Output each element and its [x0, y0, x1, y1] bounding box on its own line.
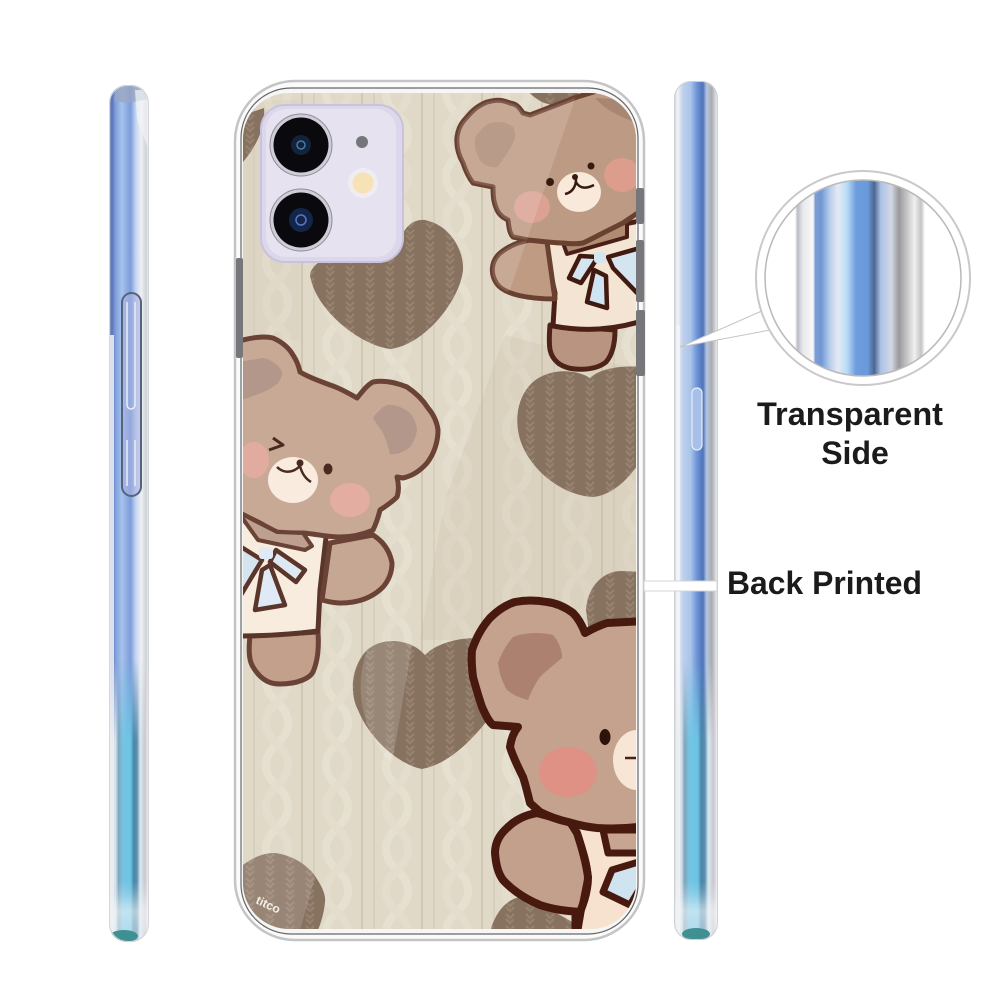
phone case: back view: [235, 81, 661, 940]
bear: bottom right: [472, 600, 661, 935]
eye: [600, 729, 610, 745]
shirt: [575, 825, 645, 935]
blush: [330, 483, 370, 517]
ear inner: [243, 358, 282, 400]
case frame: [235, 81, 644, 940]
muzzle: [268, 457, 318, 503]
knit texture: [243, 93, 636, 929]
head: [472, 600, 645, 829]
muzzle: [557, 172, 601, 212]
nose and mouth: [565, 179, 594, 194]
label: transparent side: Side: [821, 435, 889, 471]
blush: [539, 747, 597, 797]
knit hearts: [243, 90, 650, 932]
tip: [682, 928, 710, 940]
heart: top left sliver: [243, 108, 264, 162]
signature: titco: [254, 893, 283, 916]
tip: [110, 930, 138, 942]
ear inner: [475, 122, 515, 167]
foot: [249, 632, 318, 684]
bear: left wink: [238, 337, 438, 684]
nose and mouth: [277, 466, 311, 482]
magnifier callout: transparent side: [680, 171, 970, 385]
back printed leader line: [644, 581, 717, 591]
gloss: top bear: [456, 98, 576, 292]
magnified stripes: [765, 180, 961, 376]
shirt: [238, 520, 328, 636]
mouth: [625, 757, 640, 759]
head: [238, 337, 438, 537]
arm: [492, 240, 555, 299]
collar: [243, 517, 314, 552]
bow: [238, 545, 305, 610]
muzzle: [613, 730, 661, 790]
label: transparent side: [757, 396, 943, 471]
head: [457, 90, 645, 244]
heart: right: [517, 366, 636, 497]
label: transparent side: Transparent: [757, 396, 943, 432]
heart: centre: [310, 220, 463, 349]
collar: [603, 830, 645, 853]
collar: [563, 220, 627, 254]
arm: [495, 813, 588, 912]
foot: [549, 325, 615, 369]
gloss on hearts: [243, 853, 315, 930]
phone side view: right: [674, 81, 718, 950]
phone side view: left: [109, 85, 149, 950]
blush: [514, 191, 550, 223]
flash: [348, 168, 378, 198]
printed back panel: [238, 90, 661, 935]
heart: bottom left: [243, 853, 325, 930]
magnifier ring: [756, 171, 970, 385]
shirt: [550, 219, 636, 332]
bear: top right: [457, 90, 645, 369]
heart: lower centre: [353, 638, 495, 769]
side buttons: [122, 293, 141, 496]
eye: [324, 464, 332, 474]
heart: bottom edge: [490, 898, 572, 929]
side keys: [236, 188, 645, 376]
eyes: [546, 178, 554, 186]
pointer: [680, 310, 770, 347]
camera module: [261, 105, 403, 262]
label: back printed: Back Printed: [727, 565, 922, 601]
heart: behind bottom bear: [586, 571, 636, 627]
side button: [692, 388, 702, 450]
microphone: [356, 136, 368, 148]
upper lens: [270, 114, 332, 176]
heart: top edge: [530, 93, 580, 104]
lower lens: [270, 189, 332, 251]
ear inner: [498, 633, 562, 700]
arm: [322, 535, 392, 603]
wink eye: [269, 438, 283, 450]
bow: [569, 248, 640, 308]
bow: [603, 860, 645, 905]
